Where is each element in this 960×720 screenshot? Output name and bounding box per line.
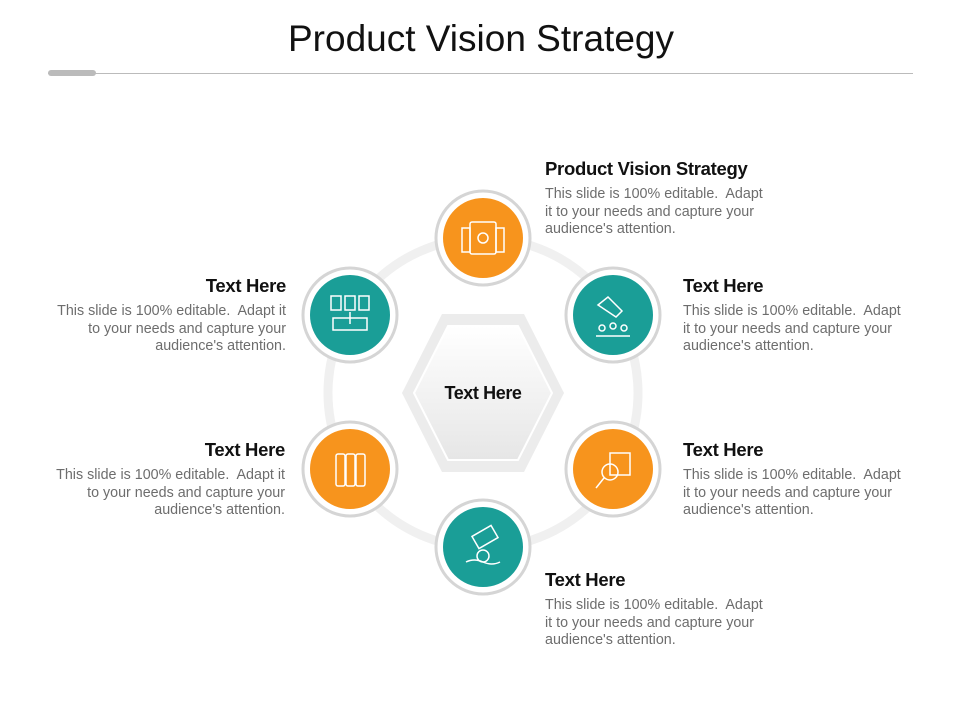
text: left top — [57, 275, 286, 354]
text: bottom — [545, 569, 763, 648]
center hexagon: Text Here — [444, 383, 522, 403]
text: left top: Text Here — [206, 275, 286, 296]
text: right bottom — [683, 439, 901, 518]
text: left bottom: This slide is 100% editable. Adapt it to your needs and capture your audience's attention. — [56, 467, 285, 518]
center hexagon — [402, 314, 564, 472]
node: top orange — [436, 191, 530, 285]
text: top: This slide is 100% editable. Adapt it to your needs and capture your audience's attention. — [545, 186, 763, 237]
text: right bottom: This slide is 100% editable. Adapt it to your needs and capture your audience's attention. — [683, 467, 901, 518]
node: bottom teal — [436, 500, 530, 594]
text: top — [545, 158, 763, 237]
text: left bottom: Text Here — [205, 439, 285, 460]
text: right top: Text Here — [683, 275, 763, 296]
text: right top: This slide is 100% editable. Adapt it to your needs and capture your audience's attention. — [683, 303, 901, 354]
node: left bottom orange — [303, 422, 397, 516]
text: left bottom — [56, 439, 285, 518]
title: Product Vision Strategy — [288, 18, 674, 59]
node: left top teal — [303, 268, 397, 362]
title underline — [48, 70, 913, 76]
text: bottom: This slide is 100% editable. Adapt it to your needs and capture your audience's attention. — [545, 597, 763, 648]
text: bottom: Text Here — [545, 569, 625, 590]
text: left top: This slide is 100% editable. Adapt it to your needs and capture your audience's attention. — [57, 303, 286, 354]
text: right bottom: Text Here — [683, 439, 763, 460]
node: right top teal — [566, 268, 660, 362]
node: right bottom orange — [566, 422, 660, 516]
text: top: Product Vision Strategy — [545, 158, 747, 179]
text: right top — [683, 275, 901, 354]
